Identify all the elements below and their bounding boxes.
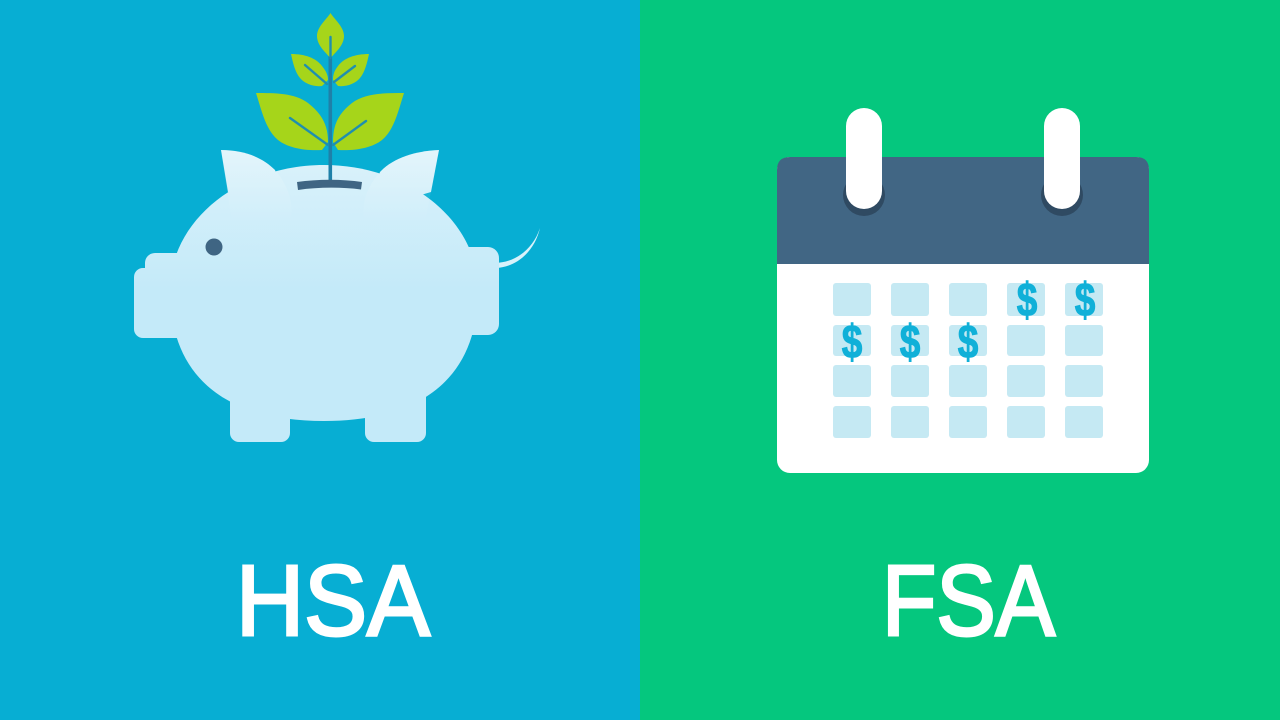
panel: HSA background xyxy=(0,0,640,720)
dollar signs: $ xyxy=(958,316,978,368)
icon: pig tail xyxy=(496,228,540,268)
dollar signs: $ xyxy=(1075,274,1095,326)
lower left leaf xyxy=(256,93,328,150)
calendar ring shadows xyxy=(843,174,1083,216)
lower right leaf xyxy=(333,93,404,150)
icon: pig eye xyxy=(206,238,222,256)
dollar signs: $ xyxy=(1017,274,1037,326)
heading: HSA: HSA xyxy=(236,545,430,657)
heading: FSA: FSA xyxy=(882,545,1055,657)
icon: plant xyxy=(256,13,404,180)
icon: ear highlights xyxy=(221,150,439,222)
upper left leaf xyxy=(291,54,328,86)
dollar signs xyxy=(842,274,1095,368)
dollar signs: $ xyxy=(842,316,862,368)
upper right leaf xyxy=(333,54,369,86)
top leaf xyxy=(317,13,344,58)
icon: coin slot xyxy=(297,180,362,190)
icon: pig body with ears, snout and feet xyxy=(134,150,499,442)
dollar signs: $ xyxy=(900,316,920,368)
plant stem xyxy=(328,50,332,180)
panel: FSA background xyxy=(640,0,1280,720)
icon: piggy bank with plant xyxy=(134,13,540,442)
calendar date grid xyxy=(833,283,1103,438)
calendar rings xyxy=(846,108,1080,209)
calendar header xyxy=(777,157,1149,264)
icon: calendar xyxy=(777,108,1149,473)
calendar page xyxy=(777,157,1149,473)
leaf veins xyxy=(290,37,366,145)
